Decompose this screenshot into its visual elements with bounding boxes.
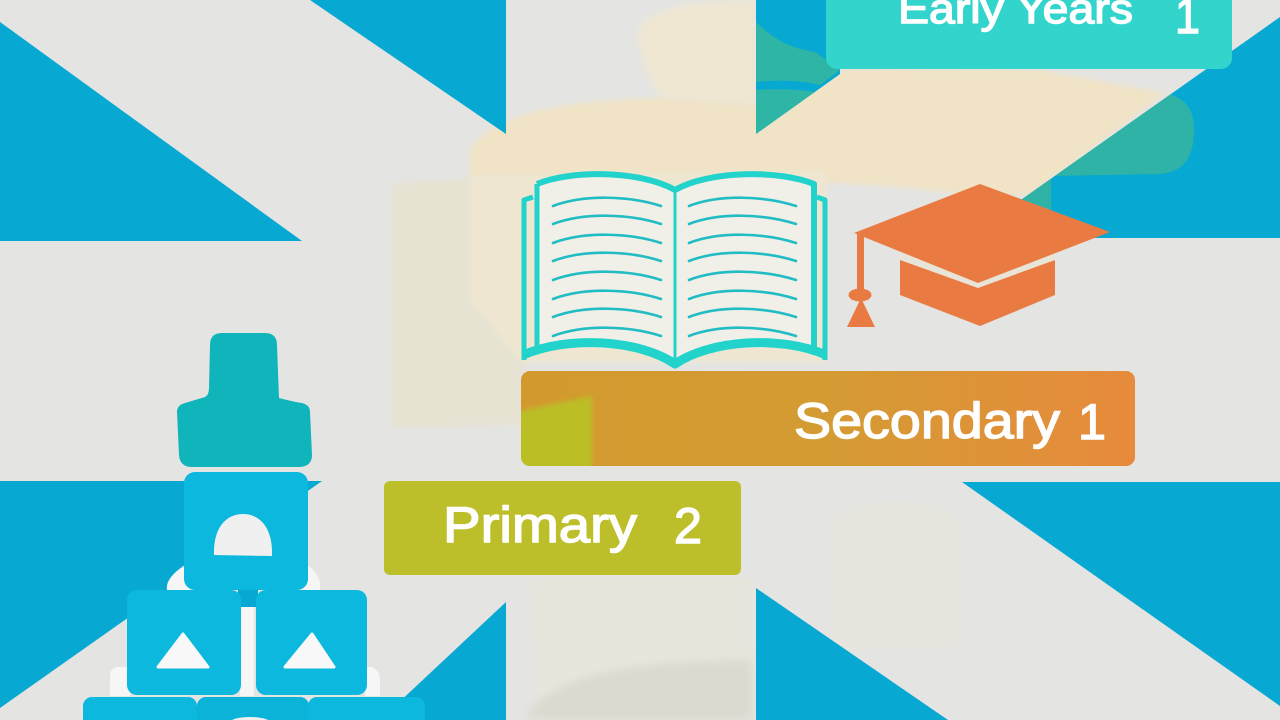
beige background shapes	[392, 0, 1165, 720]
bottom row blocks	[83, 697, 197, 720]
white backing shapes	[167, 565, 320, 590]
icon: open book	[523, 174, 826, 366]
upper block	[303, 481, 321, 492]
bar: Primary 2: Primary	[443, 497, 637, 553]
bar: Primary 2	[384, 481, 741, 575]
teal blobs on triangles	[756, 22, 1194, 215]
teal top block	[177, 333, 312, 467]
bar: Secondary 1: 1	[1078, 394, 1106, 450]
middle right block	[256, 590, 367, 695]
bar: Early Years	[826, 0, 1232, 69]
middle left block	[127, 590, 241, 695]
bar: Secondary 1	[515, 371, 1135, 470]
icon: graduation cap	[847, 184, 1110, 327]
bar: Primary 2: 2	[674, 498, 702, 554]
bar: Secondary 1: Secondary	[794, 393, 1060, 449]
icon: stacked toy blocks	[83, 333, 425, 720]
